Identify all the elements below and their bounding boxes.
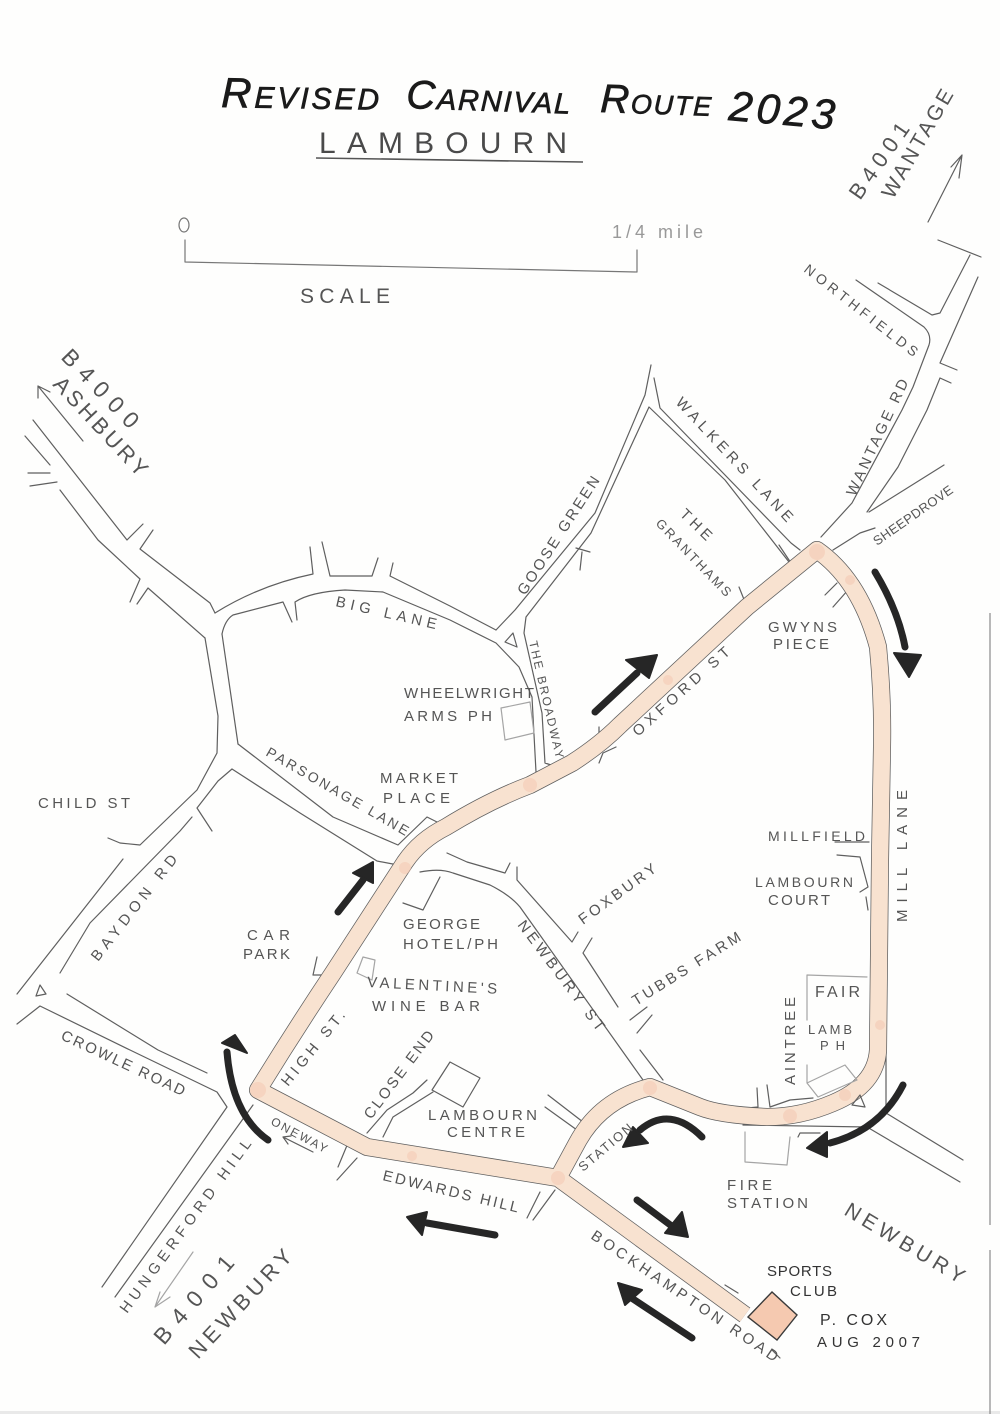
- title: 2023: [726, 82, 837, 138]
- arrow: High Street corner: [222, 1035, 268, 1140]
- road and place labels: PARSONAGE LANE: [264, 744, 412, 839]
- road and place labels: BIG LANE: [334, 593, 438, 633]
- road and place labels: COURT: [768, 892, 830, 909]
- sign: B4001 Wantage: [844, 85, 962, 222]
- road and place labels: STATION: [727, 1195, 808, 1212]
- road and place labels: LAMBOURN: [428, 1107, 537, 1124]
- sign: B4000 Ashbury: ASHBURY: [48, 371, 153, 482]
- building: Wheelwright Arms: [501, 702, 534, 740]
- road and place labels: HOTEL/PH: [403, 936, 498, 953]
- road and place labels: EDWARDS HILL: [381, 1167, 520, 1216]
- arrow: Oxford Street: [595, 655, 657, 712]
- road and place labels: PIECE: [773, 636, 829, 653]
- sign: Newbury east: NEWBURY: [840, 1199, 969, 1288]
- road and place labels: SHEEPDROVE: [870, 482, 956, 548]
- road: B4000 Ashbury: [25, 420, 215, 638]
- sports club: P. COX: [820, 1312, 887, 1329]
- direction arrows: [222, 572, 921, 1338]
- junction triangles: [36, 633, 865, 1107]
- road and place labels: WHEELWRIGHT: [404, 685, 534, 702]
- sports club: AUG 2007: [817, 1334, 920, 1351]
- subtitle: Lambourn: LAMBOURN: [319, 127, 567, 160]
- road and place labels: PLACE: [383, 790, 450, 807]
- road and place labels: GOOSE GREEN: [514, 473, 604, 598]
- road and place labels: LAMBOURN: [755, 874, 853, 890]
- sports club: SPORTS: [767, 1263, 832, 1280]
- road and place labels: THE: [676, 506, 715, 544]
- scale bar: [179, 218, 703, 308]
- road and place labels: CAR: [247, 927, 290, 944]
- road: Parsonage Lane: [232, 744, 447, 875]
- road and place labels: THE BROADWAY: [526, 640, 567, 760]
- road and place labels: BAYDON RD: [88, 851, 181, 964]
- road and place labels: TUBBS FARM: [629, 929, 744, 1009]
- title: [221, 69, 837, 138]
- road: Goose Green, Walkers Lane and The Broadway: [496, 365, 800, 767]
- road and place labels: WALKERS LANE: [672, 394, 796, 526]
- road and place labels: CROWLE ROAD: [58, 1027, 188, 1100]
- road and place labels: VALENTINE'S: [367, 974, 498, 998]
- road and place labels: WINE BAR: [372, 998, 480, 1015]
- road: Big Lane: [215, 542, 536, 772]
- carnival route: [250, 544, 885, 1315]
- small side turnings: [313, 545, 869, 1358]
- road and place labels: [38, 261, 956, 1366]
- road and place labels: MARKET: [380, 770, 458, 787]
- road and place labels: GRANTHAMS: [653, 516, 735, 600]
- road and place labels: WANTAGE RD: [843, 376, 912, 499]
- road and place labels: STATION: [575, 1120, 635, 1174]
- sign: B4001 Newbury: B4001: [148, 1250, 239, 1349]
- title: CARNIVAL: [406, 73, 571, 123]
- road and place labels: CHILD ST: [38, 795, 130, 812]
- sports club: [748, 1263, 920, 1351]
- title: ROUTE: [600, 77, 713, 125]
- road and place labels: FAIR: [815, 984, 860, 1001]
- road and place labels: PH: [820, 1038, 845, 1053]
- road and place labels: CENTRE: [447, 1124, 525, 1141]
- road: Newbury exit: [743, 1040, 963, 1182]
- road and place labels: PARK: [243, 946, 290, 963]
- arrow: Bockhampton Road: [618, 1283, 692, 1338]
- sign: B4001 Wantage: B4001: [844, 117, 915, 204]
- road and place labels: LAMB: [808, 1022, 852, 1037]
- road and place labels: ARMS PH: [404, 708, 492, 725]
- road and place labels: MILLFIELD: [768, 828, 865, 844]
- road and place labels: CLOSE END: [361, 1027, 438, 1122]
- scale bar: SCALE: [300, 285, 390, 308]
- scale bar: 1/4 mile: [612, 222, 703, 242]
- road: Newbury Street: [420, 853, 663, 1080]
- building: Fire Station: [745, 1132, 790, 1165]
- road and place labels: BOCKHAMPTON ROAD: [588, 1227, 781, 1366]
- road: Child Street and Baydon Road: [17, 634, 238, 994]
- road: Crowle Road: [17, 994, 253, 1297]
- road and place labels: ONEWAY: [269, 1114, 330, 1156]
- sign: B4000 Ashbury: B4000: [56, 343, 145, 433]
- sign: B4001 Newbury: NEWBURY: [183, 1244, 297, 1363]
- building: Lambourn Centre: [432, 1062, 480, 1107]
- road and place labels: GWYNS: [768, 619, 837, 636]
- building: Valentine's: [357, 957, 375, 980]
- road and place labels: GEORGE: [403, 916, 480, 933]
- sports club: CLUB: [790, 1283, 837, 1300]
- building: Fair site: [807, 975, 867, 1097]
- arrow: Mill Lane: [875, 572, 921, 677]
- road and place labels: HIGH ST.: [278, 1007, 349, 1090]
- arrow: High Street upper: [338, 862, 373, 912]
- road and place labels: OXFORD ST: [629, 644, 734, 740]
- road and place labels: HUNGERFORD HILL: [117, 1136, 255, 1316]
- buildings: [36, 633, 867, 1165]
- sign: B4001 Wantage: WANTAGE: [877, 85, 958, 202]
- road: Wantage Road, Northfields and Sheepdrove: [821, 240, 981, 550]
- arrow: Edwards Hill: [407, 1212, 495, 1235]
- arrow: Newbury junction: [807, 1085, 903, 1157]
- road and place labels: FIRE: [727, 1177, 772, 1194]
- road and place labels: NEWBURY ST: [514, 917, 608, 1034]
- road and place labels: NORTHFIELDS: [801, 261, 921, 360]
- arrow: towards Sports Club: [637, 1200, 688, 1237]
- road and place labels: FOXBURY: [575, 860, 660, 928]
- road and place labels: MILL LANE: [894, 790, 911, 922]
- road: Close End and station lane: [367, 1080, 583, 1137]
- arrow: towards Station Road: [623, 1119, 702, 1147]
- road network: [17, 240, 981, 1358]
- road and place labels: AINTREE: [782, 997, 799, 1085]
- title: REVISED: [221, 69, 380, 119]
